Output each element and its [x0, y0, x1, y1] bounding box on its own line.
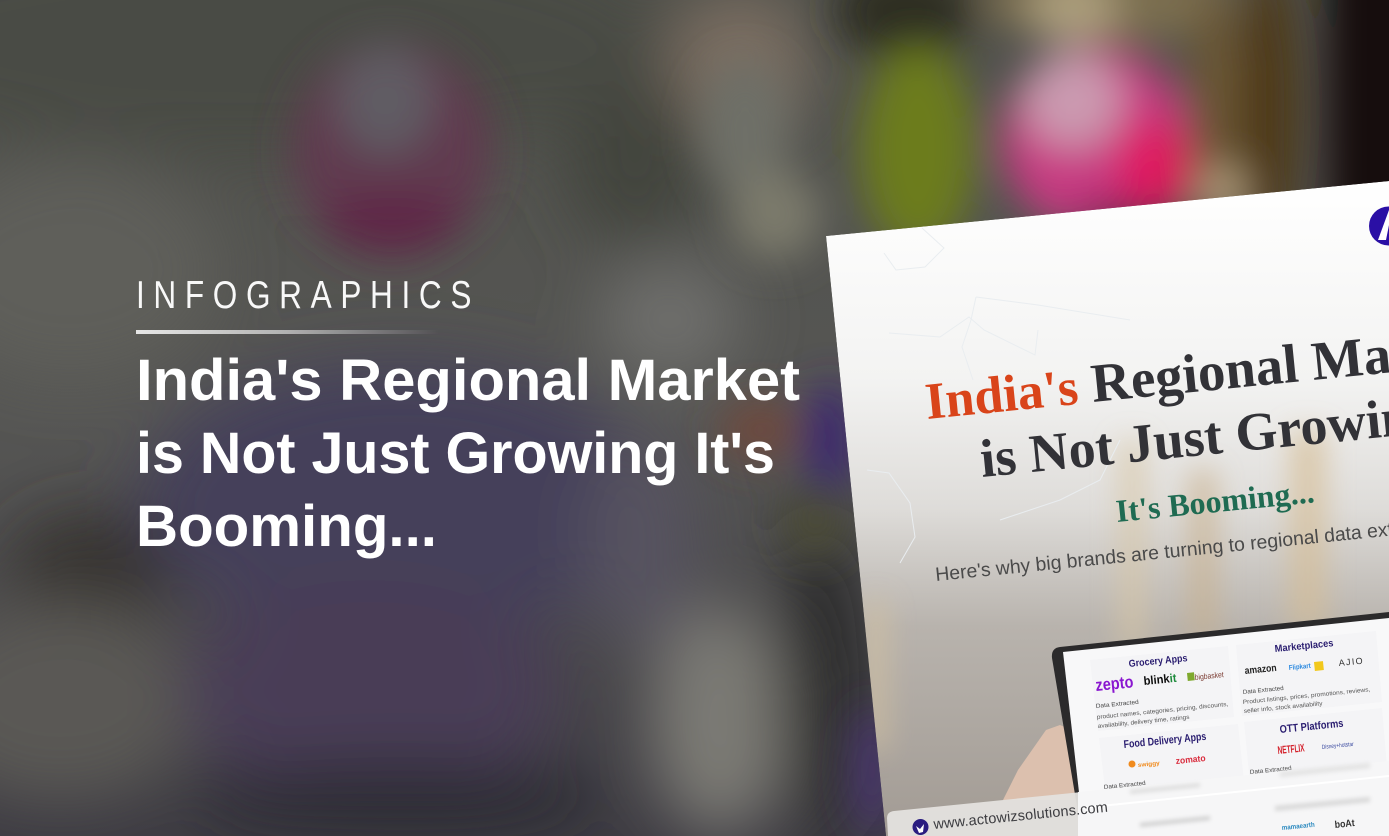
divider rule: [136, 330, 439, 334]
main heading: India's Regional Market: [136, 348, 800, 413]
brand logos: [1282, 820, 1355, 830]
panel: grocery apps: blinkit: [1143, 671, 1177, 688]
panel: grocery apps: product names, categories, pricing, discounts,: [1097, 702, 1229, 721]
panel: grocery apps: bigbasket: [1194, 670, 1225, 682]
translucent footer band: [887, 761, 1389, 836]
background streaks in card photo: [866, 430, 1326, 750]
panel: food delivery apps: Food Delivery Apps: [1123, 731, 1207, 751]
logo: [1369, 206, 1389, 246]
panel: marketplaces: Marketplaces: [1274, 638, 1334, 655]
main heading: Booming...: [136, 494, 437, 559]
rotated infographic preview card: [826, 181, 1389, 836]
panel: ott platforms: Data Extracted: [1250, 766, 1292, 776]
panel: marketplaces: Data Extracted: [1243, 686, 1284, 696]
panel: ott platforms: [1250, 718, 1354, 776]
icon: globe: [912, 819, 928, 835]
panel: marketplaces: Flipkart: [1289, 663, 1312, 672]
card subtitle: It's Booming...: [1114, 473, 1316, 529]
panel: grocery apps: [1095, 653, 1229, 730]
panel: marketplaces: seller info, stock availability: [1244, 701, 1323, 715]
brand logos: mamaearth: [1282, 822, 1315, 832]
panel: marketplaces: Product listings, prices, promotions, reviews,: [1243, 687, 1371, 706]
panel: food delivery apps: zomato: [1175, 753, 1207, 766]
tablet screen: [1063, 618, 1389, 792]
card title: India's: [923, 359, 1081, 431]
main heading: [136, 348, 800, 559]
card title: [923, 314, 1389, 489]
eyebrow label: INFOGRAPHICS: [136, 274, 471, 317]
panel: marketplaces: AJIO: [1338, 656, 1363, 668]
panel: ott platforms: NETFLIX: [1277, 742, 1306, 757]
panel: marketplaces: [1243, 638, 1371, 715]
brand logos: boAt: [1334, 818, 1356, 831]
main heading: is Not Just Growing It's: [136, 421, 775, 486]
panel: grocery apps: zepto: [1095, 672, 1134, 695]
panel: grocery apps: Data Extracted: [1096, 700, 1139, 710]
hand holding tablet: [1003, 725, 1078, 800]
panel: food delivery apps: [1104, 731, 1207, 791]
panel: food delivery apps: Data Extracted: [1104, 781, 1146, 791]
panel: marketplaces: amazon: [1244, 663, 1277, 677]
panel: ott platforms: OTT Platforms: [1279, 718, 1344, 736]
website url: www.actowizsolutions.com: [932, 800, 1109, 833]
tablet bezel: [1052, 612, 1389, 800]
panel: grocery apps: availability, delivery time, ratings: [1098, 715, 1190, 730]
panel: food delivery apps: swiggy: [1138, 761, 1161, 769]
tablet mockup: [1003, 612, 1389, 800]
panel: ott platforms: Disney+hotstar: [1322, 742, 1354, 751]
faint map outline: [867, 228, 1130, 563]
panels: [1090, 631, 1389, 814]
panel: grocery apps: Grocery Apps: [1128, 653, 1188, 670]
